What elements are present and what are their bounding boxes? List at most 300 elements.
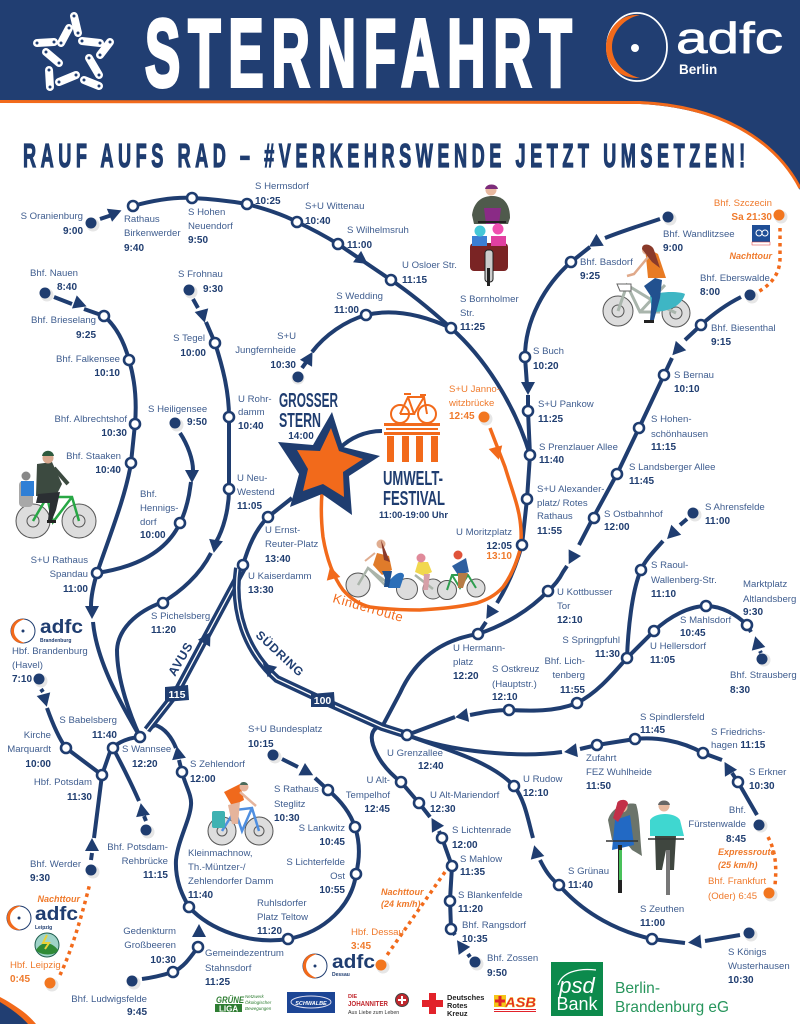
station labels: Zehlendorfer Damm: [188, 876, 273, 887]
orange labels: Hbf. Dessau: [351, 927, 404, 938]
station labels: 9:30: [30, 873, 50, 884]
station labels: 12:10: [523, 788, 549, 799]
station labels: Kleinmachnow,: [188, 848, 253, 859]
orange labels: Bhf. Frankfurt: [708, 876, 766, 887]
station labels: U Osloer Str.: [402, 260, 457, 271]
station labels: 10:55: [319, 885, 345, 896]
illustration: two cyclists front view: [606, 800, 684, 895]
station labels: Gedenkturm: [123, 926, 176, 937]
station labels: 12:20: [453, 671, 479, 682]
orange labels: Nachttour: [730, 251, 772, 261]
station labels: 10:40: [305, 216, 331, 227]
station labels: 12:30: [430, 804, 456, 815]
station labels: hagen 11:15: [711, 740, 766, 751]
station labels: S Raoul-: [651, 560, 688, 571]
label: Suedring: SÜDRING: [253, 627, 307, 679]
route: Zehlendorf: [147, 725, 191, 907]
station labels: 9:45: [127, 1007, 147, 1018]
sponsor: Gruene Liga: GRÜNE: [216, 995, 245, 1006]
orange labels: (24 km/h): [381, 899, 421, 909]
station labels: Bhf. Werder: [30, 859, 82, 870]
station labels: U Hermann-: [453, 643, 505, 654]
title: STERNFAHRT: [145, 0, 572, 107]
station labels: S Lankwitz: [299, 823, 345, 834]
route: Oranienburg to Prenzlauer Allee: [100, 198, 530, 455]
station labels: 12:40: [418, 761, 444, 772]
sponsor: PSD Bank: Bank: [556, 994, 599, 1014]
orange labels: Nachttour: [381, 887, 424, 897]
station labels: 11:25: [538, 414, 563, 425]
station labels: 11:55: [537, 526, 562, 537]
station labels: Ost: [330, 871, 345, 882]
station labels: 11:20: [151, 625, 176, 636]
illustration: family of cyclists: [346, 540, 485, 600]
route: Ahrensfelde to Springpfuhl: [627, 519, 687, 658]
heading: Grosser Stern: STERN: [279, 410, 321, 432]
station labels: U Rohr-: [238, 394, 272, 405]
orange labels: Expressroute: [718, 847, 776, 857]
station labels: 9:40: [124, 243, 144, 254]
station labels: Bhf. Rangsdorf: [462, 920, 526, 931]
route: Fuerstenwalde to Grenzallee: [407, 735, 757, 815]
route: Werder to Wannsee: [85, 737, 140, 860]
station labels: Rathaus: [537, 511, 573, 522]
station labels: 8:45: [726, 834, 746, 845]
station labels: 9:25: [580, 271, 600, 282]
station labels: Platz Teltow: [257, 912, 308, 923]
route: Jungfernheide to Bornholmer: [300, 312, 451, 368]
station labels: 11:40: [568, 880, 593, 891]
station labels: 10:20: [533, 361, 559, 372]
station labels: 10:00: [140, 530, 166, 541]
sponsor: Gruene Liga: Netzwerk: [245, 994, 265, 999]
station labels: 10:30: [274, 813, 300, 824]
station labels: S+U Bundesplatz: [248, 724, 323, 735]
station labels: 7:10: [12, 674, 32, 685]
station labels: U Kottbusser: [557, 587, 613, 598]
station labels: 10:00: [180, 348, 206, 359]
central star: Grosser Stern: [278, 412, 380, 515]
sponsor: Gruene Liga: Ökologischer: [245, 999, 272, 1005]
heading: Umweltfestival: UMWELT-: [383, 468, 443, 490]
route: Ernst-Reuter-Platz to star: [243, 431, 382, 565]
station labels: 12:00: [452, 840, 478, 851]
station labels: S Heiligensee: [148, 404, 207, 415]
logo: adfc Dessau: [303, 952, 375, 978]
station labels: 10:30: [101, 428, 127, 439]
station labels: U Hellersdorf: [650, 641, 706, 652]
station labels: S+U Wittenau: [305, 201, 364, 212]
station labels: 10:40: [238, 421, 264, 432]
orange labels: witzbrücke: [448, 398, 494, 409]
station labels: Bhf. Staaken: [66, 451, 121, 462]
station labels: 12:05: [486, 541, 512, 552]
sponsor: Johanniter: [348, 994, 408, 1016]
route: Eberswalde to Hermannplatz: [478, 297, 741, 634]
slogan: RAUF AUFS RAD – #VERKEHRSWENDE JETZT UMSETZEN!: [23, 137, 745, 174]
sponsor text: Berlin-Brandenburg eG: [615, 980, 729, 1016]
station labels: 11:40: [188, 890, 213, 901]
station labels: S Frohnau: [178, 269, 223, 280]
route: Wandlitzsee to Prenzlauer: [382, 219, 660, 727]
station labels: Wusterhausen: [728, 961, 790, 972]
sponsor: PSD Bank: psd: [558, 973, 595, 998]
orange dotted night routes: [60, 228, 780, 975]
sponsor text: Berlin-Brandenburg eG: Berlin-: [615, 980, 660, 997]
station labels: Tor: [557, 601, 571, 612]
station labels: 11:15: [143, 870, 168, 881]
station labels: 10:45: [680, 628, 706, 639]
station labels: 12:10: [492, 692, 518, 703]
station labels: Spandau: [50, 569, 88, 580]
station labels: Bhf. Basdorf: [580, 257, 633, 268]
sponsor: ASB: ASB: [504, 994, 536, 1010]
route: Suedring double line: [237, 568, 407, 735]
station labels: schönhausen: [651, 429, 708, 440]
station labels: S Prenzlauer Allee: [539, 442, 618, 453]
route: Rehbruecke to Babelsberg: [113, 748, 150, 821]
station circles: [61, 193, 752, 977]
station labels: 10:10: [94, 368, 120, 379]
route: Bundesplatz loop: [189, 759, 359, 940]
station labels: Bhf. Biesenthal: [711, 323, 776, 334]
station labels: 12:10: [557, 615, 583, 626]
station labels: Wallenberg-Str.: [651, 575, 717, 586]
orange labels: Hbf. Leipzig: [10, 960, 61, 971]
station labels: Tempelhof: [346, 790, 390, 801]
heading: Umweltfestival: FESTIVAL: [383, 488, 445, 510]
icon: bike on Brandenburg Gate: [384, 394, 440, 462]
orange labels: (25 km/h): [718, 860, 758, 870]
station labels: S Buch: [533, 346, 564, 357]
station labels: 11:30: [595, 649, 620, 660]
logo: adfc Brandenburg: [11, 617, 83, 644]
label: Kinderroute: Kinderroute: [331, 590, 405, 625]
station labels: S+U Alexander-: [537, 484, 604, 495]
station labels: Hennigs-: [140, 503, 178, 514]
logo: adfc Brandenburg: adfc: [40, 617, 83, 638]
orange labels: 12:45: [449, 411, 475, 422]
station labels: S+U: [277, 331, 296, 342]
station labels: S Friedrichs-: [711, 727, 765, 738]
station labels: 9:50: [187, 417, 207, 428]
station labels: 11:20: [257, 926, 282, 937]
station labels: S Blankenfelde: [458, 890, 523, 901]
station labels: Bhf. Brieselang: [31, 315, 96, 326]
route: Frohnau to Wannsee: [117, 299, 229, 737]
station labels: Zufahrt: [586, 753, 617, 764]
logo: adfc Leipzig: Leipzig: [35, 925, 52, 931]
orange labels: S+U Janno-: [449, 384, 500, 395]
illustration: touring cyclist: [208, 782, 273, 845]
station labels: S+U Pankow: [538, 399, 594, 410]
bottom-left corner wedge: [0, 997, 36, 1024]
station labels: S+U Rathaus: [31, 555, 88, 566]
station labels: S Erkner: [749, 767, 787, 778]
station labels: S Pichelsberg: [151, 611, 210, 622]
station labels: 10:30: [270, 360, 296, 371]
sponsor: Deutsches Rotes Kreuz: Deutsches: [447, 993, 484, 1002]
station labels: Stahnsdorf: [205, 963, 252, 974]
sponsor: Gruene Liga: LIGA: [219, 1004, 238, 1014]
station labels: 9:00: [63, 226, 83, 237]
station labels: S Grünau: [568, 866, 609, 877]
station labels: Marquardt: [7, 744, 51, 755]
station labels: dorf: [140, 517, 157, 528]
station labels: Gemeindezentrum: [205, 948, 284, 959]
station labels: S Springpfuhl: [562, 635, 620, 646]
sponsor: ASB: [494, 994, 536, 1012]
orange route: Kinderroute: [321, 428, 521, 610]
road shield 115: [165, 685, 189, 702]
station labels: Altlandsberg: [743, 594, 796, 605]
station labels: U Alt-Mariendorf: [430, 790, 500, 801]
station labels: 9:50: [188, 235, 208, 246]
sponsor: Schwalbe: [287, 992, 335, 1013]
station labels: 13:30: [248, 585, 274, 596]
orange labels: Sa 21:30: [731, 212, 772, 223]
station labels: Bhf. Albrechtshof: [54, 414, 127, 425]
station labels: Reuter-Platz: [265, 539, 319, 550]
station labels: 8:40: [57, 282, 77, 293]
station labels: Kirche: [24, 730, 51, 741]
illustration: father with child seat: [16, 451, 96, 538]
start dots: [34, 210, 788, 992]
station labels: S Lichtenrade: [452, 825, 511, 836]
station labels: S Mahlow: [460, 854, 502, 865]
station labels: 11:00: [640, 918, 665, 929]
station labels: S Ahrensfelde: [705, 502, 765, 513]
station labels: U Rudow: [523, 774, 563, 785]
logo: adfc Dessau: adfc: [332, 952, 375, 973]
road shield 100: [311, 692, 335, 707]
station labels: Großbeeren: [124, 940, 176, 951]
illustration: woman cyclist with blue pannier: [603, 245, 690, 327]
sponsor: Gruene Liga: [215, 994, 272, 1014]
station labels: Bhf. Zossen: [487, 953, 538, 964]
station labels: (Havel): [12, 660, 43, 671]
heading: Grosser Stern: GROSSER: [279, 390, 338, 412]
icon: bicycle chain star: [36, 14, 112, 88]
station labels: 13:10: [486, 551, 512, 562]
sponsor: Schwalbe: SCHWALBE: [295, 1001, 327, 1007]
station labels: 11:00: [347, 240, 372, 251]
station labels: 8:30: [730, 685, 750, 696]
station labels: S Zehlendorf: [190, 759, 245, 770]
station labels: 9:15: [711, 337, 731, 348]
logo: adfc Berlin: [606, 13, 783, 81]
station labels: Bhf. Falkensee: [56, 354, 120, 365]
station labels: 10:00: [25, 759, 51, 770]
station labels: S Mahlsdorf: [680, 615, 732, 626]
station labels: Bhf. Wandlitzsee: [663, 229, 735, 240]
station labels: 9:30: [203, 284, 223, 295]
station labels: 9:30: [743, 607, 763, 618]
station labels: Neuendorf: [188, 221, 233, 232]
station labels: U Grenzallee: [387, 748, 443, 759]
logo: Leipzig round emblem: [35, 933, 59, 957]
station labels: U Moritzplatz: [456, 527, 512, 538]
logo: adfc Dessau: Dessau: [332, 972, 350, 978]
heading: Grosser Stern: 14:00: [288, 431, 314, 442]
station labels: S Tegel: [173, 333, 205, 344]
logo: adfc Berlin: adfc: [676, 14, 783, 63]
illustration: cargo bike with children: [470, 184, 510, 286]
station labels: S Oranienburg: [21, 211, 83, 222]
route: Nauen to Wannsee: [54, 295, 140, 737]
orange labels: 0:45: [10, 974, 30, 985]
heading: Umweltfestival: [379, 468, 448, 521]
sponsor: Deutsches Rotes Kreuz: Rotes: [447, 1001, 468, 1010]
station labels: (Hauptstr.): [492, 679, 537, 690]
station labels: Hbf. Potsdam: [34, 777, 92, 788]
station labels: Bhf. Ludwigsfelde: [71, 994, 147, 1005]
station labels: Steglitz: [274, 799, 306, 810]
station labels: Bhf. Lich-: [544, 656, 585, 667]
station labels: Rathaus: [124, 214, 160, 225]
station labels: 11:45: [629, 476, 654, 487]
station labels: S Babelsberg: [59, 715, 117, 726]
station labels: 11:20: [458, 904, 483, 915]
station labels: 12:45: [364, 804, 390, 815]
road shield 100: 100: [314, 695, 331, 707]
route: Zossen to Grenzallee: [372, 725, 470, 957]
station labels: Rehbrücke: [122, 856, 168, 867]
station labels: S Zeuthen: [640, 904, 684, 915]
station labels: FEZ Wuhlheide: [586, 767, 652, 778]
route: Strausberg to Grenzallee: [407, 606, 765, 735]
sponsor: Gruene Liga: Bewegungen: [245, 1006, 272, 1011]
station labels: 11:00: [334, 305, 359, 316]
logo: adfc Brandenburg: Brandenburg: [40, 638, 71, 644]
sponsor: Johanniter: JOHANNITER: [348, 999, 388, 1008]
station labels: S Bernau: [674, 370, 714, 381]
station labels: S Lichterfelde: [286, 857, 345, 868]
route: Heiligensee to Spandau: [97, 433, 199, 573]
station labels: 12:00: [190, 774, 216, 785]
station labels: Marktplatz: [743, 579, 787, 590]
station labels: Bhf.: [729, 805, 746, 816]
station labels: S Hohen-: [651, 414, 692, 425]
station labels: 8:00: [700, 287, 720, 298]
station labels: 10:30: [728, 975, 754, 986]
station labels: 10:25: [255, 196, 281, 207]
logo: adfc Leipzig: [7, 904, 78, 931]
station labels: 11:50: [586, 781, 611, 792]
sponsor: Deutsches Rotes Kreuz: Kreuz: [447, 1009, 468, 1018]
logo: adfc Berlin: Berlin: [679, 62, 717, 77]
station labels: Jungfernheide: [235, 345, 296, 356]
station labels: Fürstenwalde: [688, 819, 746, 830]
station labels: U Kaiserdamm: [248, 571, 311, 582]
station labels: 10:40: [95, 465, 121, 476]
station labels: Westend: [237, 487, 275, 498]
station labels: 9:50: [487, 968, 507, 979]
header banner: [0, 0, 800, 190]
station labels: S Hohen: [188, 207, 225, 218]
orange labels: [10, 198, 776, 985]
station labels: 10:30: [749, 781, 775, 792]
station labels: 11:40: [539, 455, 564, 466]
station labels: 11:00: [705, 516, 730, 527]
station labels: 13:40: [265, 554, 291, 565]
station labels: Bhf. Strausberg: [730, 670, 797, 681]
station labels: 10:10: [674, 384, 700, 395]
route: Brandenburg to Potsdam: [37, 689, 102, 775]
label: Avus: AVUS: [165, 640, 196, 678]
station labels: S Spindlersfeld: [640, 712, 705, 723]
station labels: 10:30: [150, 955, 176, 966]
station labels: 11:30: [67, 792, 92, 803]
station labels: Bhf. Potsdam-: [107, 842, 168, 853]
station labels: Birkenwerder: [124, 228, 181, 239]
sponsor: Deutsches Rotes Kreuz: [422, 993, 484, 1018]
station labels: 12:20: [132, 759, 158, 770]
station labels: S Hermsdorf: [255, 181, 309, 192]
orange labels: Nachttour: [38, 894, 80, 904]
station labels: Bhf. Nauen: [30, 268, 78, 279]
station labels: S Rathaus: [274, 784, 319, 795]
station labels: 11:25: [205, 977, 230, 988]
station labels: U Neu-: [237, 473, 267, 484]
station labels: 11:45: [640, 725, 665, 736]
sponsor: Johanniter: DIE: [348, 994, 358, 1000]
station labels: S Königs: [728, 947, 767, 958]
station labels: 10:45: [319, 837, 345, 848]
station labels: Ruhlsdorfer: [257, 898, 307, 909]
station labels: 12:00: [604, 522, 630, 533]
station labels: S Ostkreuz: [492, 664, 540, 675]
orange labels: (Oder) 6:45: [708, 891, 757, 902]
station labels: 11:15: [651, 442, 676, 453]
station labels: Str.: [460, 308, 474, 319]
route: Avus double line: [147, 568, 243, 730]
heading: Umweltfestival: 11:00-19:00 Uhr: [379, 510, 448, 521]
route: Koenigs Wusterhausen to Grenzallee: [407, 735, 740, 950]
station labels: Bhf. Eberswalde: [700, 273, 770, 284]
station labels: tenberg: [552, 670, 585, 681]
sponsor text: Berlin-Brandenburg eG: Brandenburg eG: [615, 999, 729, 1016]
station labels: 11:25: [460, 322, 485, 333]
sponsor: Johanniter: Aus Liebe zum Leben: [348, 1010, 399, 1016]
station labels: S Wilhelmsruh: [347, 225, 409, 236]
station labels: S Wannsee: [122, 744, 171, 755]
station labels: 10:15: [248, 739, 274, 750]
station labels: 11:05: [237, 501, 262, 512]
station labels: 9:25: [76, 330, 96, 341]
station labels: S Bornholmer: [460, 294, 519, 305]
station labels: 10:35: [462, 934, 488, 945]
station labels: 11:55: [560, 685, 585, 696]
orange labels: 3:45: [351, 941, 371, 952]
station labels: S Wedding: [336, 291, 383, 302]
orange labels: Bhf. Szczecin: [714, 198, 772, 209]
route: Ludwigsfelde: [142, 924, 206, 979]
station labels: 11:35: [460, 867, 485, 878]
station labels: U Alt-: [367, 775, 390, 786]
station labels: 11:10: [651, 589, 676, 600]
station labels: platz: [453, 657, 473, 668]
station labels: S Ostbahnhof: [604, 509, 663, 520]
station labels: 11:05: [650, 655, 675, 666]
station labels: 11:15: [402, 275, 427, 286]
road shield 115: 115: [169, 689, 186, 701]
station labels: damm: [238, 407, 265, 418]
station labels: 11:40: [92, 730, 117, 741]
station labels: S Landsberger Allee: [629, 462, 715, 473]
station labels: Bhf.: [140, 489, 157, 500]
station labels: U Ernst-: [265, 525, 300, 536]
